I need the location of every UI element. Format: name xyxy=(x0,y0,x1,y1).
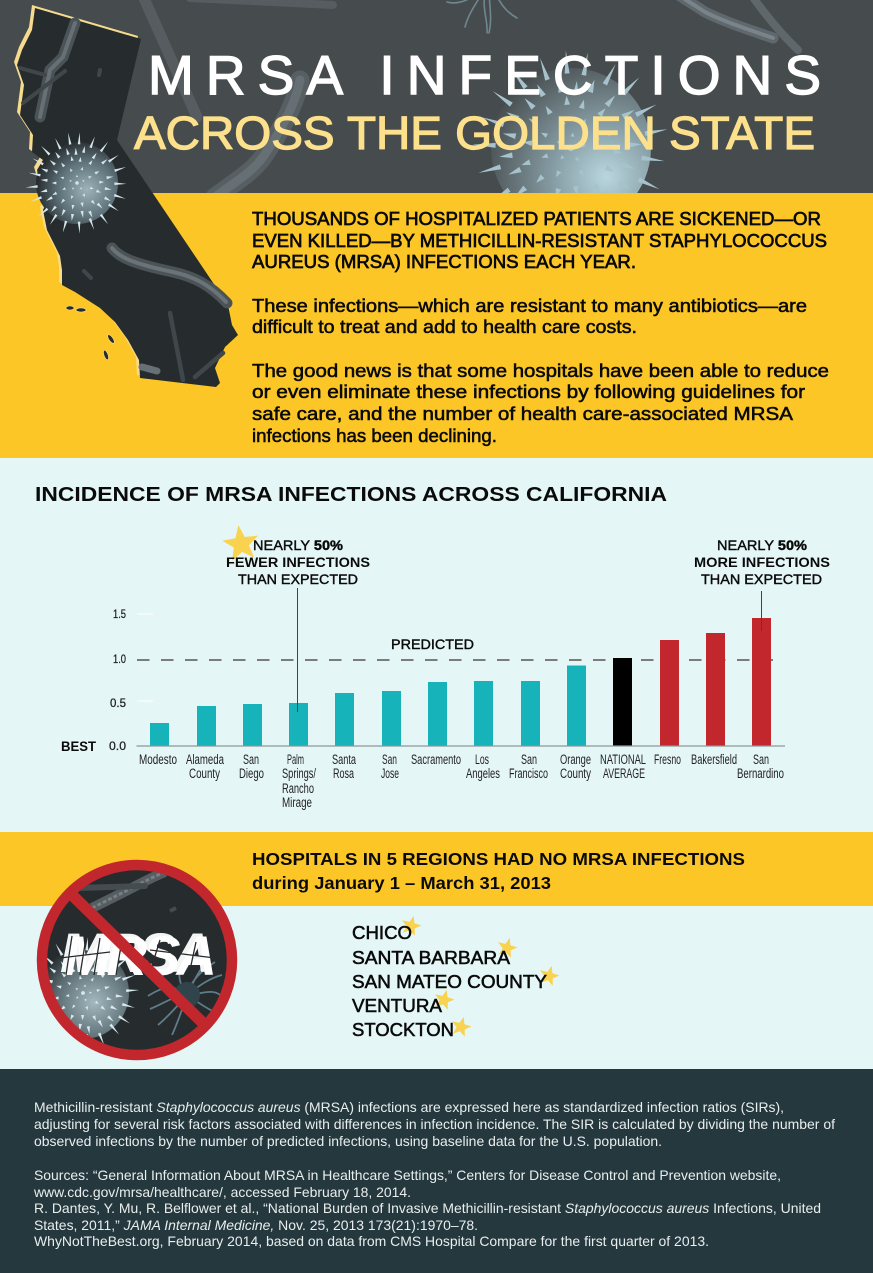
x axis labels: Santa xyxy=(332,752,356,767)
paragraph 2: These infections—which are resistant to many antibiotics—are xyxy=(252,295,807,316)
callout text xyxy=(226,538,370,587)
x axis labels: Los xyxy=(475,752,489,767)
paragraph 1: THOUSANDS OF HOSPITALIZED PATIENTS ARE SICKENED—OR xyxy=(252,208,821,229)
footer panel xyxy=(0,1069,873,1273)
x axis labels: Alameda xyxy=(186,752,224,767)
sources: WhyNotTheBest.org, February 2014, based on data from CMS Hospital Compare for the first quarter of 2013. xyxy=(34,1233,709,1249)
paragraph 2: difficult to treat and add to health care costs. xyxy=(252,316,637,337)
title xyxy=(134,44,821,159)
x axis labels: Springs/ xyxy=(282,766,316,781)
teal bars xyxy=(150,666,586,746)
icon: star xyxy=(220,523,261,562)
callout: fewer infections xyxy=(220,523,370,712)
paragraph 1: EVEN KILLED—BY METHICILLIN-RESISTANT STAPHYLOCOCCUS xyxy=(252,230,827,251)
x axis labels: Francisco xyxy=(509,766,548,781)
baseline xyxy=(136,745,785,747)
x axis labels: Bakersfield xyxy=(691,752,737,767)
x axis labels: Palm xyxy=(287,752,304,767)
red bars xyxy=(660,618,771,746)
region names xyxy=(352,922,547,1040)
paragraph 3 xyxy=(252,360,829,446)
map silhouette xyxy=(17,8,238,387)
callout text: THAN EXPECTED xyxy=(701,572,822,587)
x axis labels: San xyxy=(753,752,769,767)
x axis labels: Angeles xyxy=(466,766,500,781)
paragraph 1: AUREUS (MRSA) INFECTIONS EACH YEAR. xyxy=(252,251,636,272)
paragraph 1 xyxy=(252,208,827,272)
sources: Sources: “General Information About MRSA in Healthcare Settings,” Centers for Disease Control and Prevention website, xyxy=(34,1167,781,1183)
paragraph 3: The good news is that some hospitals have been able to reduce xyxy=(252,360,829,381)
x axis labels xyxy=(139,752,784,810)
list of regions xyxy=(352,913,561,1040)
leader line xyxy=(296,588,298,712)
header panel xyxy=(0,0,873,193)
MRSA glitch text: MRSA xyxy=(64,924,217,987)
x axis labels: Diego xyxy=(239,766,264,781)
title line 2: ACROSS THE GOLDEN STATE xyxy=(134,107,815,159)
region names: SAN MATEO COUNTY xyxy=(352,971,547,992)
map gold outline xyxy=(14,5,235,384)
ring xyxy=(42,865,232,1055)
y axis labels: 0.0 xyxy=(109,741,126,753)
national average bar xyxy=(613,658,632,746)
banner line 1: HOSPITALS IN 5 REGIONS HAD NO MRSA INFECTIONS xyxy=(252,849,745,869)
callout text: NEARLY 50% xyxy=(717,538,807,553)
germ: flagellated xyxy=(148,960,222,1035)
x axis labels: Sacramento xyxy=(411,752,461,767)
germ: large spiky ball xyxy=(473,50,668,193)
x axis labels: Rancho xyxy=(282,781,314,796)
bar chart xyxy=(61,609,785,810)
paragraph 3: safe care, and the number of health care-associated MRSA xyxy=(252,403,794,424)
region names: STOCKTON xyxy=(352,1019,454,1040)
MRSA glitch text: MRSA xyxy=(60,921,213,984)
x axis labels: San xyxy=(521,752,537,767)
slash xyxy=(70,893,205,1025)
paragraph 2 xyxy=(252,295,807,337)
sources xyxy=(33,1167,821,1249)
methodology note: observed infections by the number of predicted infections, using baseline data for the U.S. population. xyxy=(34,1133,662,1149)
paragraph 3: infections has been declining. xyxy=(252,425,497,446)
predicted dashed line xyxy=(137,659,773,661)
region names: VENTURA xyxy=(352,995,443,1016)
x axis labels: San xyxy=(243,752,259,767)
sources: States, 2011,” JAMA Internal Medicine, Nov. 25, 2013 173(21):1970–78. xyxy=(34,1217,478,1233)
x axis labels: Bernardino xyxy=(737,766,784,781)
callout text: NEARLY 50% xyxy=(253,538,343,553)
predicted label: PREDICTED xyxy=(391,636,474,652)
stars xyxy=(399,913,561,1038)
methodology note xyxy=(34,1099,835,1149)
leader line xyxy=(760,591,762,631)
callout text: THAN EXPECTED xyxy=(238,572,358,587)
x axis labels: Fresno xyxy=(654,752,681,767)
yellow intro panel xyxy=(0,193,873,458)
x axis labels: NATIONAL xyxy=(600,752,646,767)
y axis labels: 0.5 xyxy=(110,698,126,710)
best label: BEST xyxy=(61,739,97,754)
title line 1: MRSA INFECTIONS xyxy=(148,44,821,106)
sources: www.cdc.gov/mrsa/healthcare/, accessed February 18, 2014. xyxy=(33,1184,411,1200)
sources: R. Dantes, Y. Mu, R. Belflower et al., “National Burden of Invasive Methicillin-resistant Staphylococcus aureus Infections, United xyxy=(34,1200,821,1216)
methodology note: adjusting for several risk factors associated with differences in infection incidence. The SIR is calculated by dividing the number of xyxy=(34,1116,835,1132)
x axis labels: County xyxy=(560,766,591,781)
bacteria in sign xyxy=(47,872,222,1044)
chart panel background xyxy=(0,458,873,832)
x axis labels: Orange xyxy=(560,752,591,767)
x axis labels: County xyxy=(189,766,220,781)
icon: no MRSA prohibition sign xyxy=(14,865,232,1061)
y axis labels xyxy=(109,609,126,753)
islands xyxy=(66,306,116,360)
paragraph 3: or even eliminate these infections by following guidelines for xyxy=(252,381,805,402)
bacteria inside map xyxy=(20,23,227,380)
x axis labels: Rosa xyxy=(333,766,354,781)
grid ticks xyxy=(137,614,153,701)
callout: more infections xyxy=(694,538,830,631)
y axis labels: 1.5 xyxy=(113,609,126,621)
bacteria background xyxy=(143,0,798,197)
california map with germ xyxy=(14,5,238,387)
intro text xyxy=(252,208,829,446)
callout text: MORE INFECTIONS xyxy=(694,555,830,570)
germ: spiky ball xyxy=(47,938,139,1044)
regions panel background xyxy=(0,906,873,1069)
germ on map xyxy=(25,132,126,234)
callout text xyxy=(694,538,830,587)
x axis labels: San xyxy=(382,752,397,767)
methodology note: Methicillin-resistant Staphylococcus aureus (MRSA) infections are expressed here as standardized infection ratios (SIRs), xyxy=(34,1099,784,1115)
region names: SANTA BARBARA xyxy=(352,947,511,968)
x axis labels: Jose xyxy=(381,766,399,781)
x axis labels: Modesto xyxy=(139,752,177,767)
callout text: FEWER INFECTIONS xyxy=(226,555,370,570)
region names: CHICO xyxy=(352,922,412,943)
x axis labels: AVERAGE xyxy=(603,766,645,781)
chart heading: INCIDENCE OF MRSA INFECTIONS ACROSS CALIFORNIA xyxy=(35,484,667,506)
y axis labels: 1.0 xyxy=(113,654,126,666)
x axis labels: Mirage xyxy=(282,795,312,810)
banner line 2: during January 1 – March 31, 2013 xyxy=(252,873,551,893)
regions banner xyxy=(0,832,873,906)
